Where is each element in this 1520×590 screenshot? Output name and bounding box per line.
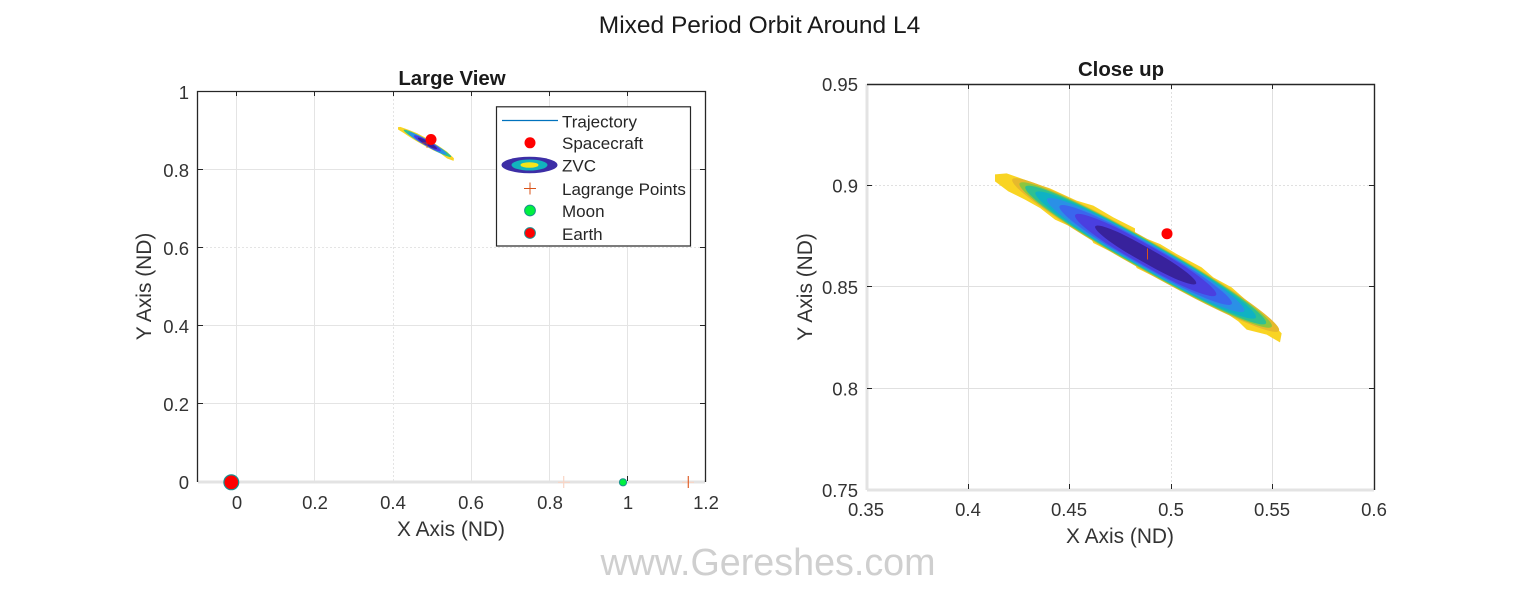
x axis tick labels: 0.4 — [955, 499, 981, 520]
y axis tick labels: 0.4 — [163, 316, 189, 337]
y axis tick labels: 0 — [179, 472, 189, 493]
y axis tick labels: 0.95 — [822, 74, 858, 95]
y axis label: Y Axis (ND) — [794, 233, 817, 341]
x axis tick labels: 1.2 — [693, 492, 719, 513]
x axis tick labels — [232, 492, 719, 513]
x axis tick labels: 0.35 — [848, 499, 884, 520]
legend — [496, 107, 690, 246]
lagrange point L1 — [558, 476, 570, 488]
spacecraft marker — [1162, 228, 1172, 239]
y axis tick labels: 0.2 — [163, 394, 189, 415]
moon marker — [619, 479, 627, 486]
y axis tick labels: 0.6 — [163, 238, 189, 259]
heading: close up: Close up — [1078, 59, 1164, 81]
x axis tick labels: 0 — [232, 492, 242, 513]
legend: moon: Moon — [562, 202, 605, 221]
title: Mixed Period Orbit Around L4 — [599, 12, 920, 39]
x axis tick labels: 1 — [623, 492, 633, 513]
watermark: www.Gereshes.com — [599, 541, 936, 583]
earth marker — [224, 475, 239, 490]
legend: ZVC — [502, 156, 596, 176]
x axis tick labels: 0.6 — [458, 492, 484, 513]
legend: earth — [525, 225, 603, 244]
legend: moon — [525, 202, 605, 221]
legend: trajectory: Trajectory — [562, 112, 637, 132]
legend: spacecraft: Spacecraft — [562, 134, 644, 153]
panel: close up — [794, 59, 1387, 548]
y axis tick labels: 1 — [179, 82, 189, 103]
x axis tick labels: 0.55 — [1254, 499, 1290, 520]
x axis tick labels: 0.2 — [302, 492, 328, 513]
spacecraft marker — [426, 134, 436, 145]
lagrange point L4 — [1146, 248, 1148, 260]
legend: spacecraft — [524, 134, 644, 153]
legend: ZVC: ZVC — [562, 156, 596, 176]
y axis tick labels — [822, 74, 858, 501]
y axis tick labels: 0.9 — [832, 176, 858, 196]
heading: large view: Large View — [398, 68, 506, 90]
y axis tick labels: 0.75 — [822, 480, 858, 501]
lagrange point L2 — [682, 476, 694, 488]
zero velocity curve: large view — [398, 127, 454, 161]
legend: earth: Earth — [562, 225, 603, 244]
x axis tick labels: 0.4 — [380, 492, 406, 513]
legend: trajectory — [502, 112, 637, 132]
lagrange point L4 — [422, 138, 432, 148]
x axis tick labels: 0.5 — [1158, 499, 1184, 520]
legend: lagrange points: Lagrange Points — [562, 180, 686, 199]
y axis tick labels: 0.85 — [822, 277, 858, 298]
x axis tick labels: 0.45 — [1051, 499, 1087, 520]
y axis tick labels: 0.8 — [163, 160, 189, 181]
y axis label: Y Axis (ND) — [133, 233, 156, 340]
x axis label: X Axis (ND) — [397, 518, 505, 541]
x axis tick labels: 0.6 — [1361, 499, 1387, 520]
zero velocity curve: close up — [995, 167, 1286, 343]
y axis tick labels — [163, 82, 189, 493]
panel: large view — [133, 68, 719, 541]
y axis tick labels: 0.8 — [832, 378, 858, 400]
x axis tick labels — [848, 499, 1387, 520]
x axis tick labels: 0.8 — [537, 492, 563, 513]
x axis label: X Axis (ND) — [1066, 525, 1174, 548]
